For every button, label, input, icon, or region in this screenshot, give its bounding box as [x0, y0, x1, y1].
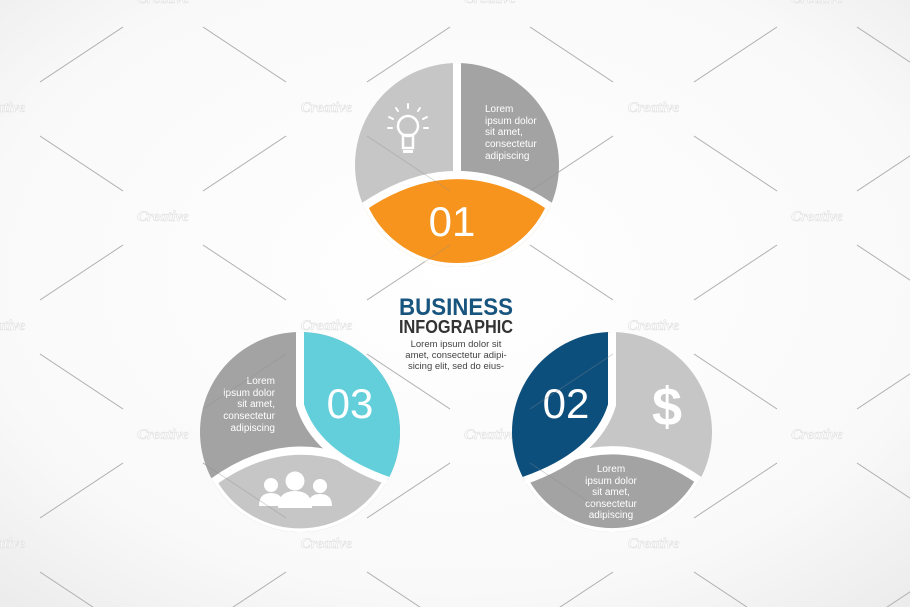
text: description: Lorem ipsum dolor sit [411, 339, 502, 350]
text: top right segment: consectetur [485, 139, 537, 150]
title: INFOGRAPHIC [399, 317, 513, 337]
title: BUSINESS [399, 294, 513, 321]
text: bottom segment: adipiscing [589, 510, 633, 521]
text: bottom segment: consectetur [585, 499, 638, 510]
icon: people [259, 472, 332, 508]
text: left segment: sit amet, [237, 399, 275, 410]
number 03: 03 [327, 380, 373, 427]
text: top right segment: sit amet, [485, 127, 523, 138]
text: bottom segment: sit amet, [592, 487, 630, 498]
segment: cyan 03 [296, 332, 400, 484]
text: bottom segment: Lorem [597, 464, 625, 475]
text: description: amet, consectetur adipi- [405, 350, 507, 361]
text: top right segment: adipiscing [485, 151, 529, 162]
text: left segment: Lorem [247, 376, 275, 387]
text: top right segment: ipsum dolor [485, 116, 537, 127]
segment: navy 02 [512, 332, 616, 484]
segment: dark gray bottom [524, 450, 700, 532]
text: description: sicing elit, sed do eius- [408, 361, 504, 372]
text: top right segment: Lorem [485, 104, 513, 115]
segment: orange 01 [364, 175, 550, 267]
title [399, 294, 513, 372]
icon: lightbulb [388, 104, 428, 153]
text: bottom segment: ipsum dolor [585, 476, 638, 487]
circle 01 [355, 63, 559, 267]
circle 03 [200, 332, 400, 532]
icon: dollar: $ [652, 377, 682, 437]
circle 02 [512, 332, 712, 532]
text: left segment: adipiscing [231, 423, 275, 434]
number 02: 02 [543, 380, 589, 427]
text: left segment: consectetur [223, 411, 276, 422]
number 01: 01 [429, 198, 475, 245]
text: left segment: ipsum dolor [223, 388, 276, 399]
segment: light gray bottom [213, 451, 388, 532]
